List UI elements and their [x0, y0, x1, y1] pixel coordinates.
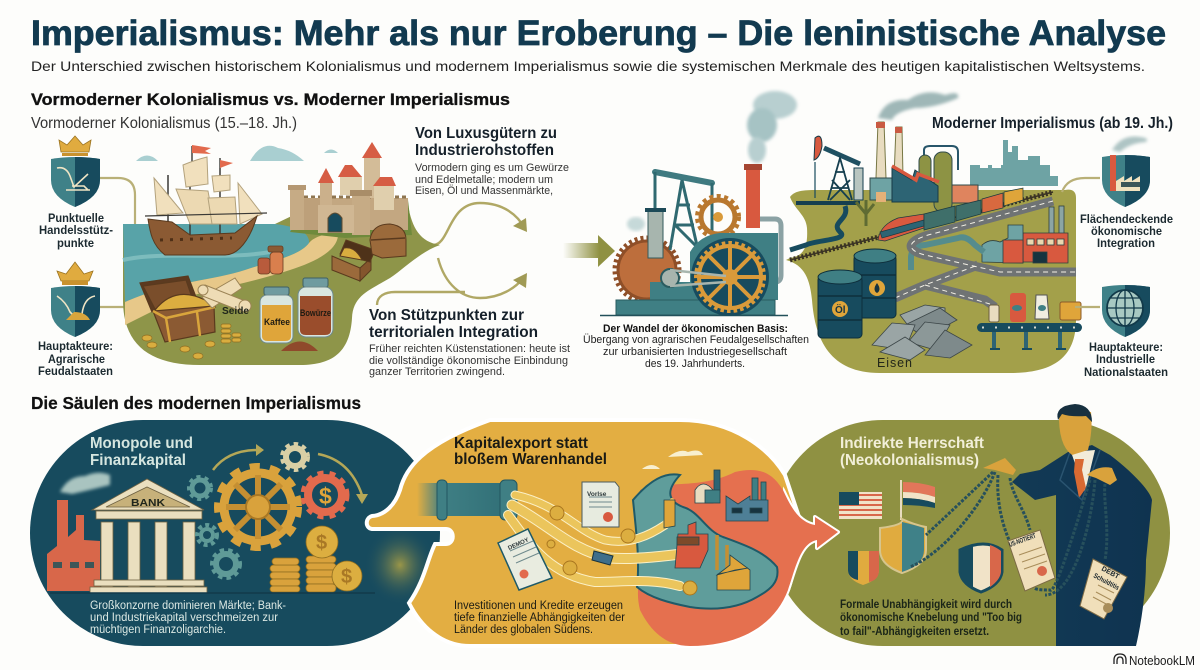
arrows: curved transition arrows [377, 203, 527, 305]
document labels: Schuldtitis [1092, 573, 1120, 592]
jar: coffee [260, 287, 293, 343]
panel heading: Kapitalexport statt [454, 435, 588, 452]
pump frame [655, 172, 712, 183]
coin dollar signs: $ [341, 566, 352, 588]
document labels [1008, 533, 1121, 592]
caption: economic base: Der Wandel der ökonomischen Basis: [603, 323, 788, 335]
label: main actors industrial states: Hauptakteure: [1089, 342, 1163, 354]
small gear [701, 200, 735, 234]
panel text [840, 599, 1022, 638]
caption: economic base [583, 323, 809, 370]
sea [123, 224, 309, 302]
label: main actors industrial states: Nationalstaaten [1084, 367, 1168, 379]
scrolls [198, 278, 251, 312]
tanks and pipes [924, 146, 958, 170]
label: punctual trading posts: Handelsstütz- [39, 225, 113, 237]
label: main actors industrial states: Industrielle [1096, 354, 1155, 366]
illustration: industrial landscape [786, 92, 1082, 373]
panel text: to fail"-Abhängigkeiten ersetzt. [840, 626, 989, 638]
text block: from luxury goods to raw materials: Eisen, Öl und Massenmärkte, [415, 185, 553, 197]
connectors: right shields [1062, 178, 1100, 307]
skyline [970, 140, 1058, 186]
land [123, 204, 440, 365]
caption: economic base: zur urbanisierten Industriegesellschaft [603, 346, 787, 358]
document labels: US-NOTIERT [1008, 533, 1037, 549]
text block: from outposts to territorial integration: Früher reichten Küstenstationen: heute ist [369, 343, 570, 355]
refinery [982, 206, 1068, 263]
text block: from luxury goods to raw materials: Vormodern ging es um Gewürze [415, 162, 569, 174]
illustration: steam engine [600, 91, 797, 316]
panel heading: Monopole und [90, 435, 193, 452]
label: comprehensive integration [1080, 214, 1173, 250]
panel heading [90, 435, 193, 469]
barrels [818, 249, 896, 338]
chimneys [876, 122, 886, 178]
label: main actors agrarian feudal states [38, 341, 113, 378]
certificate [582, 482, 619, 527]
panel heading: (Neokolonialismus) [840, 452, 979, 469]
panel text [90, 600, 286, 636]
coin dollar signs: $ [316, 532, 327, 554]
oil pump [790, 136, 874, 250]
smoke [878, 92, 958, 120]
label: comprehensive integration: ökonomische [1091, 226, 1162, 238]
man in suit [983, 404, 1152, 646]
jar: spices [281, 278, 333, 351]
panel: capital export [367, 420, 838, 646]
label: main actors industrial states [1084, 342, 1168, 379]
label: comprehensive integration: Flächendeckende [1080, 214, 1173, 226]
jar: coffee: Kaffee [264, 317, 290, 328]
label: main actors agrarian feudal states: Agrarische [48, 354, 105, 366]
iron ingots [872, 305, 972, 360]
icon: shield with factory [1102, 137, 1150, 207]
panel heading: bloßem Warenhandel [454, 451, 607, 468]
coins in streams [547, 506, 697, 595]
panel heading [840, 435, 984, 469]
copper wheel [618, 241, 676, 299]
text block: from outposts to territorial integration: die vollständige ökonomische Einbindung [369, 355, 568, 367]
panel text [454, 600, 625, 636]
label: comprehensive integration: Integration [1097, 238, 1155, 250]
logo: NotebookLM: NotebookLM [1129, 654, 1195, 668]
panel heading [454, 435, 607, 468]
coral arrow outline [783, 486, 840, 594]
conveyor belt [977, 293, 1082, 349]
panel text: Formale Unabhängigkeit wird durch [840, 599, 1012, 611]
subtitle: Der Unterschied zwischen historischem Kolonialismus und modernem Imperialismus sowie die systemischen Merkmale des heutigen kapitalistischen Weltsystems. [31, 59, 1145, 74]
text block: from outposts to territorial integration [369, 307, 570, 378]
label: punctual trading posts [39, 213, 113, 250]
panel heading: Indirekte Herrschaft [840, 435, 984, 452]
spice pots [258, 246, 283, 274]
bank label: BANK [131, 498, 166, 509]
heading: pillars: Die Säulen des modernen Imperialismus [31, 393, 361, 413]
label: silk: Seide [222, 305, 249, 317]
flags [839, 480, 935, 520]
clouds [642, 451, 703, 469]
factory [870, 178, 900, 200]
shields [848, 519, 1002, 592]
certificate: Vorlse [587, 491, 607, 498]
label: iron: Eisen [877, 356, 912, 370]
label: punctual trading posts: Punktuelle [48, 213, 104, 225]
panel text: müchtigen Finanzoligarchie. [90, 624, 226, 636]
heading: modern imperialism: Moderner Imperialismus (ab 19. Jh.) [932, 115, 1173, 132]
text block: from luxury goods to raw materials [415, 125, 569, 197]
demand document: DEMOY [507, 537, 530, 552]
heading: premodern colonialism: Vormoderner Kolonialismus (15.–18. Jh.) [31, 115, 297, 132]
heading: comparison section: Vormoderner Kolonialismus vs. Moderner Imperialismus [31, 90, 510, 109]
pipeline [911, 237, 984, 270]
panel: indirect rule [770, 404, 1170, 646]
text block: from outposts to territorial integration: ganzer Territorien zwingend. [369, 366, 505, 378]
coral land with arrow [638, 470, 838, 646]
panel text: tiefe finanzielle Abhängigkeiten der [454, 612, 625, 624]
rail and train [790, 192, 1053, 260]
icon: crowned shield with plough [51, 136, 100, 207]
text block: from luxury goods to raw materials: und Edelmetalle; modern um [415, 174, 553, 186]
label: main actors agrarian feudal states: Feudalstaaten [38, 366, 113, 378]
coin dollar signs [316, 532, 352, 588]
illustration: colonial coast scene [123, 142, 440, 365]
small chests [332, 224, 406, 281]
caption: economic base: Übergang von agrarischen Feudalgesellschaften [583, 334, 809, 346]
connectors: left shields to scene [100, 178, 135, 307]
demand document [498, 529, 552, 590]
gears [189, 444, 362, 578]
beach [125, 232, 338, 325]
title: Imperialismus: Mehr als nur Eroberung – Die leninistische Analyse [31, 14, 1166, 53]
panel text: Länder des globalen Südens. [454, 624, 593, 636]
bank [90, 479, 207, 593]
roads [895, 201, 1076, 307]
panel text: Großkonzorne dominieren Märkte; Bank- [90, 600, 286, 612]
body [650, 233, 778, 300]
jar: spices: Bowürze [300, 308, 331, 318]
text block: from luxury goods to raw materials: Industrierohstoffen [415, 142, 554, 159]
small factories [664, 470, 768, 590]
text block: from outposts to territorial integration: territorialen Integration [369, 324, 538, 341]
text block: from luxury goods to raw materials: Von Luxusgütern zu [415, 125, 557, 142]
caption: economic base: des 19. Jahrhunderts. [645, 358, 745, 370]
icon: shield with globe [1102, 285, 1150, 337]
panel: monopolies and finance capital [30, 420, 440, 646]
big gear [691, 238, 769, 316]
chains [910, 472, 1107, 595]
arrow: transition [563, 235, 615, 267]
teal island [633, 474, 778, 609]
panel text: und Industriekapital verschmeizen zur [90, 612, 278, 624]
treasure chest [140, 276, 241, 359]
coin stacks [270, 526, 362, 592]
castle [288, 142, 412, 238]
clouds [136, 146, 338, 161]
ship [145, 145, 267, 255]
pipe [417, 483, 517, 516]
icon: crowned shield with agrarian symbol [51, 262, 100, 337]
label: punctual trading posts: punkte [57, 238, 94, 250]
panel text: Investitionen und Kredite erzeugen [454, 600, 623, 612]
text block: from outposts to territorial integration: Von Stützpunkten zur [369, 307, 524, 324]
debt document [1008, 530, 1127, 619]
factory [47, 473, 110, 591]
panel text: ökonomische Knebelung und "Too big [840, 612, 1022, 624]
panel heading: Finanzkapital [90, 452, 186, 469]
dollar sign on gear: $ [319, 483, 332, 509]
document labels: DEBT [1100, 566, 1121, 581]
capital streams [508, 495, 700, 586]
chimney [746, 168, 760, 228]
label: main actors agrarian feudal states: Hauptakteure: [38, 341, 113, 353]
barrels: Öl [835, 303, 846, 316]
